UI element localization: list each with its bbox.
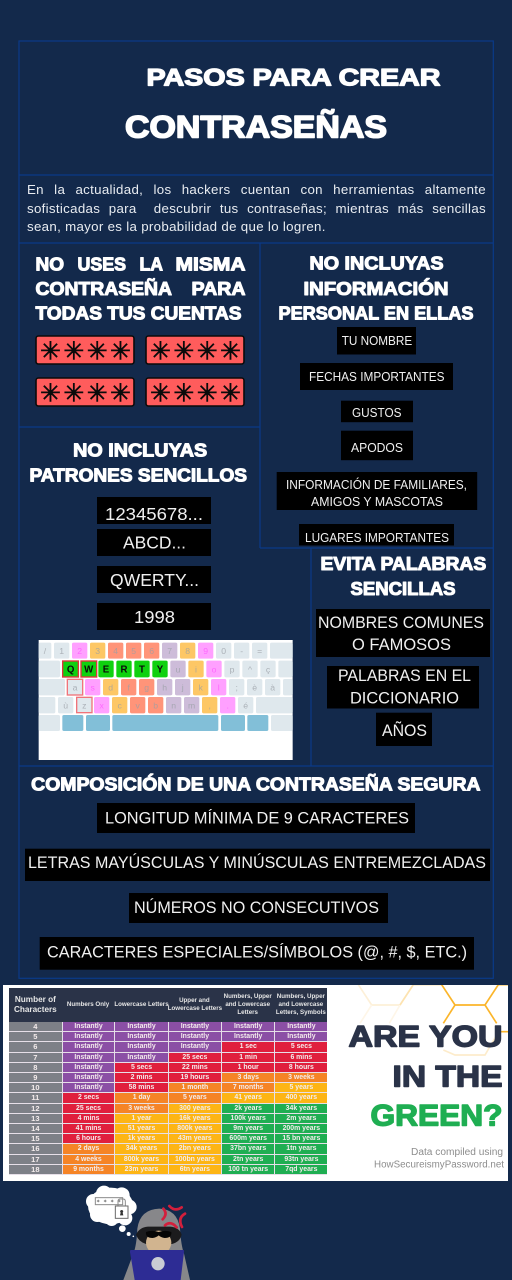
password field and padlock: **** <box>97 1199 121 1206</box>
key labels: f <box>127 682 130 692</box>
key labels: n <box>171 700 176 710</box>
key labels: 1 <box>59 646 64 656</box>
heading: no uses la misma: USES <box>78 254 126 274</box>
item: abcd: ABCD... <box>123 533 186 553</box>
chart: password cracking time table: 15 bn years <box>282 1135 320 1142</box>
angry symbol <box>163 1206 185 1227</box>
item: longitud mínima: LONGITUD MÍNIMA DE 9 CARACTERES <box>105 809 409 828</box>
key labels: , <box>208 700 211 710</box>
panel: no incluyas patrones sencillos <box>30 440 293 760</box>
item: familiares <box>277 472 477 510</box>
panel: are you in the green <box>348 985 510 1171</box>
chart: password cracking time table: 9 months <box>73 1166 104 1173</box>
item: qwerty: QWERTY... <box>110 570 199 590</box>
key labels: m <box>188 700 195 710</box>
chart: password cracking time table: 5 years <box>183 1094 207 1101</box>
chart: password cracking time table: 25 secs <box>76 1105 101 1112</box>
chart: password cracking time table: and Lowercase <box>278 1001 323 1008</box>
chart: password cracking time table: 16k years <box>179 1115 211 1122</box>
heading: no uses la misma <box>36 254 246 324</box>
chart: password cracking time table: Lowercase Letters <box>114 1001 169 1008</box>
key labels: 6 <box>149 646 154 656</box>
asterisks: ✳✳✳✳ <box>40 378 131 408</box>
chart: password cracking time table: Characters <box>14 1005 57 1014</box>
chart: password cracking time table: 34k years <box>126 1145 157 1152</box>
chart: password cracking time table: Instantly <box>287 1033 316 1040</box>
chart: password cracking time table: Instantly <box>127 1033 156 1040</box>
chart: password cracking time table: Letters, Symbols <box>276 1009 326 1016</box>
heading: no uses la misma: PARA <box>192 278 246 299</box>
chart: password cracking time table: Upper and <box>179 997 210 1004</box>
laptop <box>130 1250 184 1280</box>
chart: password cracking time table: 19 hours <box>180 1074 209 1081</box>
chart: password cracking time table: 6 <box>33 1042 37 1051</box>
item: letras mayúsculas y minúsculas: LETRAS MAYÚSCULAS Y MINÚSCULAS ENTREMEZCLADAS <box>28 853 486 872</box>
chart: password cracking time table: 7 <box>33 1053 37 1062</box>
chart: password cracking time table: 800k years <box>177 1125 212 1132</box>
key labels: ^ <box>248 664 253 674</box>
item: caracteres especiales: CARACTERES ESPECIALES/SÍMBOLOS (@, #, $, ETC.) <box>47 943 467 962</box>
heading: evita palabras: SENCILLAS <box>350 578 456 599</box>
chart: password cracking time table: 1 hour <box>238 1064 259 1071</box>
key labels: è <box>252 682 257 692</box>
item: lugares importantes: LUGARES IMPORTANTES <box>305 531 449 545</box>
chart: password cracking time table: 43m years <box>178 1135 212 1142</box>
chart: password cracking time table: 100bn years <box>175 1156 215 1163</box>
key labels: p <box>230 664 235 674</box>
key labels: ù <box>63 700 68 710</box>
key labels: é <box>243 700 248 710</box>
item: gustos: GUSTOS <box>352 406 402 420</box>
heading: composición: COMPOSICIÓN DE UNA CONTRASEÑA SEGURA <box>31 774 481 794</box>
chart: password cracking time table: 16 <box>31 1144 40 1153</box>
chart: password cracking time table: Instantly <box>74 1043 103 1050</box>
asterisks: ✳✳✳✳ <box>150 336 241 366</box>
asterisks: ✳✳✳✳ <box>150 378 241 408</box>
key labels: i <box>195 664 197 674</box>
chart: password cracking time table: Instantly <box>74 1084 103 1091</box>
item: nombres comunes: O FAMOSOS <box>352 635 451 654</box>
heading: evita palabras: EVITA PALABRAS <box>320 553 486 574</box>
chart: password cracking time table: 58 mins <box>129 1084 154 1091</box>
chart: password cracking time table: 1 month <box>181 1084 208 1091</box>
chart: password cracking time table: Numbers, Upper <box>224 993 272 1000</box>
chart: password cracking time table: Instantly <box>127 1054 156 1061</box>
item: abcd <box>97 529 211 556</box>
chart: password cracking time table: Numbers Only <box>67 1001 109 1008</box>
heading: no uses la misma: TODAS TUS CUENTAS <box>36 302 242 324</box>
item: apodos <box>341 431 413 460</box>
source credit <box>374 1147 504 1171</box>
item: años: AÑOS <box>382 721 427 740</box>
key labels: 8 <box>185 646 190 656</box>
key labels: o <box>212 664 217 674</box>
chart: password cracking time table: 9m years <box>233 1125 263 1132</box>
panel: no uses la misma contraseña <box>36 254 246 408</box>
item: palabras en el diccionario: DICCIONARIO <box>350 689 459 708</box>
key labels: . <box>226 700 229 710</box>
key labels: 5 <box>131 646 136 656</box>
key labels: ç <box>266 664 271 674</box>
chart: password cracking time table: 6 hours <box>76 1135 101 1142</box>
key labels: d <box>108 682 113 692</box>
headline: are you in the green: IN THE <box>392 1060 502 1094</box>
keyboard image: Y <box>157 665 164 676</box>
heading: información personal: NO INCLUYAS <box>310 252 444 274</box>
intro paragraph <box>27 182 486 234</box>
headline: are you in the green: GREEN? <box>370 1100 502 1132</box>
keyboard image <box>39 640 293 760</box>
chart: password cracking time table: 1 min <box>239 1054 257 1061</box>
heading: no uses la misma: NO <box>36 254 64 274</box>
item: tu nombre: TU NOMBRE <box>342 334 412 348</box>
keyboard image: T <box>139 665 145 676</box>
chart: password cracking time table: 8 <box>33 1063 37 1072</box>
chart: password cracking time table: 1 year <box>132 1115 151 1122</box>
chart: password cracking time table: 6 mins <box>290 1054 312 1061</box>
item: longitud mínima <box>97 803 415 833</box>
chart: password cracking time table: 14 <box>31 1124 40 1133</box>
chart: password cracking time table: 34k years <box>286 1105 317 1112</box>
key labels: à <box>270 682 275 692</box>
chart: password cracking time table: 9 <box>33 1073 37 1082</box>
key labels: z <box>82 700 86 710</box>
item: 1998: 1998 <box>134 607 175 627</box>
key labels: 7 <box>167 646 172 656</box>
thought bubble <box>86 1186 137 1237</box>
item: familiares: AMIGOS Y MASCOTAS <box>311 495 443 509</box>
key labels: / <box>44 646 47 656</box>
key labels: - <box>240 646 243 656</box>
keyboard image: R <box>121 665 128 676</box>
title <box>125 64 440 144</box>
hexagon pattern <box>358 985 510 1055</box>
key labels: = <box>257 646 262 656</box>
chart: password cracking time table: 4 mins <box>78 1115 99 1122</box>
chart: password cracking time table: 93tn years <box>284 1156 318 1163</box>
chart: password cracking time table: 2tn years <box>233 1156 263 1163</box>
heading: patrones sencillos: NO INCLUYAS <box>73 440 207 460</box>
chart: password cracking time table: 18 <box>31 1165 40 1174</box>
item: caracteres especiales <box>40 937 474 970</box>
chart: password cracking time table: Numbers, Upper <box>277 993 325 1000</box>
chart: password cracking time table: Instantly <box>74 1064 103 1071</box>
chart: password cracking time table: 2 secs <box>78 1094 99 1101</box>
chart: password cracking time table: 7qd years <box>285 1166 317 1173</box>
chart: password cracking time table: 200m years <box>283 1125 320 1132</box>
chart: password cracking time table: Lowercase Letters <box>168 1005 222 1012</box>
heading: información personal: INFORMACIÓN <box>304 278 448 299</box>
chart: password cracking time table: 4 weeks <box>75 1156 102 1163</box>
chart: password cracking time table: 1k years <box>128 1135 155 1142</box>
illustration: hacker with thought bubble <box>86 1186 190 1280</box>
item: lugares importantes <box>299 524 454 546</box>
panel: no incluyas información personal <box>277 252 477 546</box>
chart: password cracking time table: 25 secs <box>182 1054 207 1061</box>
chart: password cracking time table: Instantly <box>181 1033 209 1040</box>
intro paragraph: sofisticadas para descubrir tus contraseñas; mientras más sencillas <box>27 200 486 216</box>
heading: no uses la misma: CONTRASEÑA <box>36 278 172 299</box>
item: fechas importantes: FECHAS IMPORTANTES <box>309 370 444 384</box>
chart: password cracking time table: 7 months <box>233 1084 264 1091</box>
chart: password cracking time table: Instantly <box>181 1023 209 1030</box>
chart: password cracking time table: 2bn years <box>179 1145 211 1152</box>
key labels: v <box>136 700 141 710</box>
chart: password cracking time table: 2 days <box>78 1145 99 1152</box>
chart: password cracking time table: 5 secs <box>131 1064 152 1071</box>
chart: password cracking time table: 4 <box>33 1022 37 1031</box>
chart: password cracking time table: Instantly <box>74 1074 103 1081</box>
key labels: b <box>153 700 158 710</box>
key labels: l <box>218 682 220 692</box>
chart: password cracking time table: Letters <box>237 1009 258 1016</box>
heading: no uses la misma: MISMA <box>176 254 246 274</box>
item: apodos: APODOS <box>351 441 403 455</box>
chart: password cracking time table: 2m years <box>286 1115 316 1122</box>
chart: password cracking time table: Instantly <box>127 1023 156 1030</box>
chart: password cracking time table: 15 <box>31 1134 40 1143</box>
panel grid: section borders <box>19 41 493 978</box>
chart: password cracking time table: 37bn years <box>230 1145 266 1152</box>
chart: password cracking time table: 3 weeks <box>288 1074 315 1081</box>
heading: evita palabras <box>320 553 486 599</box>
chart: password cracking time table: 1tn years <box>286 1145 316 1152</box>
chart: password cracking time table: Instantly <box>234 1033 262 1040</box>
item: fechas importantes <box>300 363 453 390</box>
panel: composición de una contraseña segura <box>25 774 490 970</box>
item: números no consecutivos: NÚMEROS NO CONSECUTIVOS <box>134 898 379 917</box>
chart: password cracking time table: Instantly <box>74 1033 103 1040</box>
chart: password cracking time table: 11 <box>31 1093 39 1102</box>
key labels: j <box>181 682 184 692</box>
item: palabras en el diccionario <box>327 666 479 708</box>
key labels: 2 <box>77 646 82 656</box>
keyboard image: Q <box>67 665 75 676</box>
key labels: 4 <box>113 646 118 656</box>
item: letras mayúsculas y minúsculas <box>25 849 490 881</box>
heading: patrones sencillos: PATRONES SENCILLOS <box>30 464 247 486</box>
chart: password cracking time table: 600m years <box>229 1135 267 1142</box>
chart: password cracking time table: 1 day <box>133 1094 150 1101</box>
chart: password cracking time table: 41 mins <box>76 1125 101 1132</box>
asterisks <box>40 336 241 408</box>
heading: información personal <box>278 252 474 324</box>
asterisks: ✳✳✳✳ <box>40 336 131 366</box>
key labels: x <box>100 700 105 710</box>
intro paragraph: En la actualidad, los hackers cuentan con herramientas altamente <box>27 182 486 197</box>
password bars <box>36 336 244 406</box>
key labels <box>44 646 275 710</box>
chart: password cracking time table: 13 <box>31 1114 40 1123</box>
chart: password cracking time table: 23m years <box>125 1166 158 1173</box>
chart: password cracking time table: Instantly <box>74 1023 103 1030</box>
item: números no consecutivos <box>129 893 388 923</box>
item: familiares: INFORMACIÓN DE FAMILIARES, <box>286 477 467 492</box>
key labels: u <box>176 664 181 674</box>
key labels: ; <box>235 682 238 692</box>
chart: password cracking time table: Instantly <box>287 1023 316 1030</box>
chart: password cracking time table: 10 <box>31 1083 40 1092</box>
key labels: 3 <box>95 646 100 656</box>
title: PASOS PARA CREAR <box>146 64 440 92</box>
heading: no uses la misma: LA <box>140 254 163 274</box>
item: 12345678: 12345678... <box>105 504 203 524</box>
chart: password cracking time table: 3 days <box>237 1074 259 1081</box>
key labels: k <box>199 682 204 692</box>
keyboard image: W <box>84 665 94 676</box>
chart: password cracking time table: 1 sec <box>240 1043 257 1050</box>
item: años <box>376 713 432 746</box>
chart: password cracking time table: 2 mins <box>131 1074 152 1081</box>
item: gustos <box>341 401 413 422</box>
chart: password cracking time table: 51 years <box>128 1125 155 1132</box>
key labels: h <box>162 682 167 692</box>
chart: password cracking time table: 400 years <box>286 1094 317 1101</box>
chart: password cracking time table: 22 mins <box>182 1064 208 1071</box>
source credit: HowSecureismyPassword.net <box>374 1160 504 1171</box>
title: CONTRASEÑAS <box>125 108 387 144</box>
key labels: 0 <box>221 646 226 656</box>
item: 1998 <box>97 603 211 630</box>
chart: password cracking time table: 12 <box>31 1104 40 1113</box>
chart: password cracking time table: 6tn years <box>180 1166 210 1173</box>
item: tu nombre <box>337 327 416 354</box>
chart: password cracking time table: Instantly <box>127 1043 156 1050</box>
chart: password cracking time table: Number of <box>15 995 56 1004</box>
chart: password cracking time table: 5 years <box>289 1084 313 1091</box>
chart: password cracking time table: Instantly <box>74 1054 103 1061</box>
headline: are you in the green: ARE YOU <box>348 1020 502 1054</box>
chart: password cracking time table: 5 <box>33 1032 37 1041</box>
chart: password cracking time table: 800k years <box>124 1156 159 1163</box>
key labels: s <box>91 682 96 692</box>
chart: password cracking time table: 41 years <box>234 1094 262 1101</box>
chart: password cracking time table: 8 hours <box>289 1064 314 1071</box>
intro paragraph: sean, mayor es la probabilidad de que lo logren. <box>27 219 326 234</box>
chart: password cracking time table: and Lowercase <box>225 1001 270 1008</box>
chart: password cracking time table: 5 secs <box>291 1043 312 1050</box>
chart: password cracking time table: 2k years <box>234 1105 262 1112</box>
key labels: a <box>73 682 78 692</box>
keyboard image: E <box>103 665 110 676</box>
key labels: 9 <box>203 646 208 656</box>
chart: password cracking time table: Instantly <box>181 1043 209 1050</box>
chart: password cracking time table: 3 weeks <box>128 1105 155 1112</box>
key labels: g <box>144 682 149 692</box>
chart: password cracking time table: 300 years <box>179 1105 211 1112</box>
item: palabras en el diccionario: PALABRAS EN EL <box>338 666 471 685</box>
headline: are you in the green <box>348 1020 502 1132</box>
heading: patrones sencillos <box>30 440 247 486</box>
chart: password cracking time table: 100 tn years <box>228 1166 268 1173</box>
chart: password cracking time table: 100k years <box>231 1115 266 1122</box>
item: nombres comunes: NOMBRES COMUNES <box>318 613 484 632</box>
item: 12345678 <box>97 497 211 524</box>
hacker figure <box>123 1209 190 1280</box>
chart: password cracking time table: Instantly <box>234 1023 262 1030</box>
chart: password cracking time table: 17 <box>31 1155 40 1164</box>
item: qwerty <box>97 566 211 593</box>
chart: password cracking time table <box>9 988 327 1175</box>
key labels: c <box>118 700 123 710</box>
item: nombres comunes <box>316 609 490 657</box>
heading: información personal: PERSONAL EN ELLAS <box>278 302 474 324</box>
panel: evita palabras sencillas <box>316 553 490 746</box>
source credit: Data compiled using <box>411 1147 503 1158</box>
panel: white chart background <box>3 985 508 1181</box>
